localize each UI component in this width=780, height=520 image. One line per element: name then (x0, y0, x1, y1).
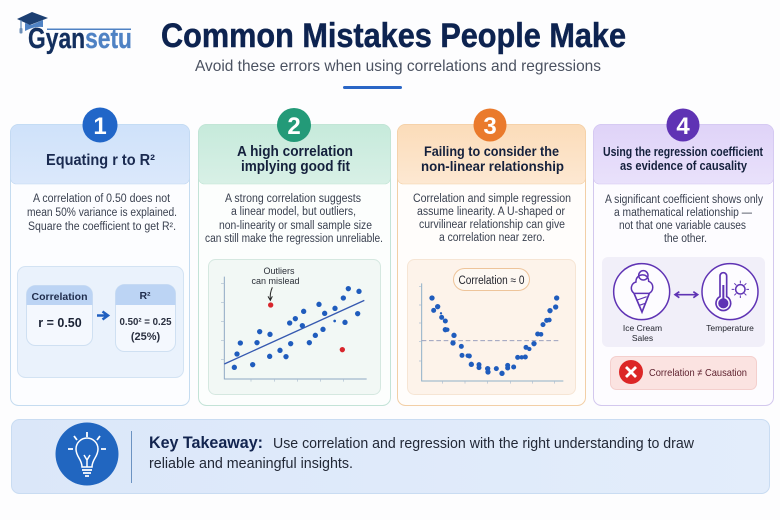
logo rule above wordmark (47, 28, 131, 30)
panel 3 body text: a correlation near zero. (439, 232, 545, 244)
correlation label pill: Correlation ≈ 0 (458, 275, 524, 287)
outlier arrow (268, 287, 272, 300)
panel 1: Equating r to R² (10, 108, 190, 406)
takeaway text: reliable and meaningful insights. (149, 455, 353, 472)
correlation box: Correlation (31, 291, 88, 303)
correlation box (26, 286, 92, 346)
ice cream label: Sales (632, 333, 653, 343)
temperature label: Temperature (706, 323, 754, 333)
panel 2 body text: non-linearity or small sample size (219, 220, 372, 232)
outlier callout: Outliers (263, 266, 295, 276)
title underline (343, 86, 402, 89)
R squared box: 0.50² = 0.25 (120, 316, 172, 328)
correlation not causation callout (610, 356, 756, 390)
R squared box: (25%) (131, 331, 161, 343)
panel 3 body text: assume linearity. A U-shaped or (417, 206, 565, 218)
panel 4 header (594, 124, 774, 184)
R squared box (116, 284, 176, 352)
panel 2 heading: A high correlation (237, 144, 353, 160)
panel 2 body text: can still make the regression unreliable. (205, 233, 383, 245)
axes (224, 277, 367, 379)
number badge 2: 2 (287, 113, 301, 140)
panel 3 body text: Correlation and simple regression (413, 193, 571, 205)
number badge 1 (82, 108, 118, 142)
correlation not causation callout: Correlation ≠ Causation (649, 367, 747, 379)
panel 4 body text: a mathematical relationship — (614, 207, 752, 219)
panel 4 body text: not that one variable causes (619, 220, 746, 232)
scatter chart with outliers (208, 260, 380, 394)
panel 3 heading: non-linear relationship (421, 158, 564, 174)
panel 3: non-linear relationship (398, 108, 586, 406)
panel 2 heading (237, 144, 353, 175)
outlier callout (251, 266, 300, 286)
double arrow (675, 292, 698, 298)
panel 3 header (398, 124, 586, 184)
icon: light bulb (56, 422, 118, 486)
takeaway text (149, 433, 694, 472)
ice cream label (623, 323, 662, 343)
icon: ice cream (614, 264, 670, 320)
zero correlation line (422, 339, 561, 342)
panel 1 body text: mean 50% variance is explained. (27, 207, 177, 219)
outlier callout: can mislead (251, 276, 300, 286)
diagram: r to R squared (18, 266, 184, 378)
logo wordmark: Gyansetu (28, 23, 132, 55)
number badge 4 (666, 108, 700, 142)
panel 1 body text: Square the coefficient to get R². (28, 221, 176, 233)
panel 4 heading: as evidence of causality (620, 159, 747, 173)
panel 2 body text: a linear model, but outliers, (231, 206, 356, 218)
number badge 1: 1 (93, 113, 107, 140)
panel 2 header (198, 124, 390, 184)
number badge 2 (277, 108, 311, 142)
trend line (224, 300, 364, 364)
ice cream label: Ice Cream (623, 323, 662, 333)
panel 4 heading (603, 145, 764, 173)
outlier points (268, 302, 345, 352)
takeaway text: Use correlation and regression with the right understanding to draw (273, 435, 694, 452)
logo: Gyansetu (17, 12, 132, 55)
panel 4 body text: the other. (664, 233, 707, 245)
panel 4 body text (605, 194, 763, 245)
panel 2: high correlation (198, 108, 390, 406)
panel 2 body text (205, 193, 383, 245)
panel 1 header (10, 124, 190, 184)
subtitle: Avoid these errors when using correlations and regressions (195, 58, 601, 75)
panel 3 heading (421, 143, 564, 174)
panel 4: causality (594, 108, 774, 406)
data points (429, 295, 559, 376)
axes (422, 283, 563, 381)
data points (232, 286, 362, 370)
panel 2 body text: A strong correlation suggests (225, 193, 361, 205)
takeaway text: Key Takeaway: (149, 433, 263, 452)
panel 1 body text (27, 193, 177, 233)
title: Common Mistakes People Make (161, 17, 626, 55)
key takeaway banner (12, 420, 770, 494)
panel 3 heading: Failing to consider the (424, 143, 559, 159)
panel 3 body text: curvilinear relationship can give (419, 219, 565, 231)
number badge 3: 3 (483, 113, 497, 140)
divider (131, 431, 132, 483)
panel 1 heading: Equating r to R² (46, 152, 155, 169)
correlation label pill (454, 268, 530, 290)
panel 3 body text (413, 193, 571, 244)
number badge 3 (474, 108, 506, 142)
correlation box: r = 0.50 (38, 316, 82, 330)
number badge 4: 4 (676, 113, 690, 140)
panel 4 body text: A significant coefficient shows only (605, 194, 763, 206)
U-shaped scatter chart (408, 260, 576, 394)
icon: thermometer and sun (702, 264, 758, 320)
icon: graduation cap (17, 12, 48, 34)
panel 2 heading: implying good fit (241, 159, 350, 175)
arrow (97, 312, 108, 320)
panel 1 body text: A correlation of 0.50 does not (33, 193, 171, 205)
R squared box: R² (139, 290, 151, 302)
causality diagram (602, 257, 765, 347)
